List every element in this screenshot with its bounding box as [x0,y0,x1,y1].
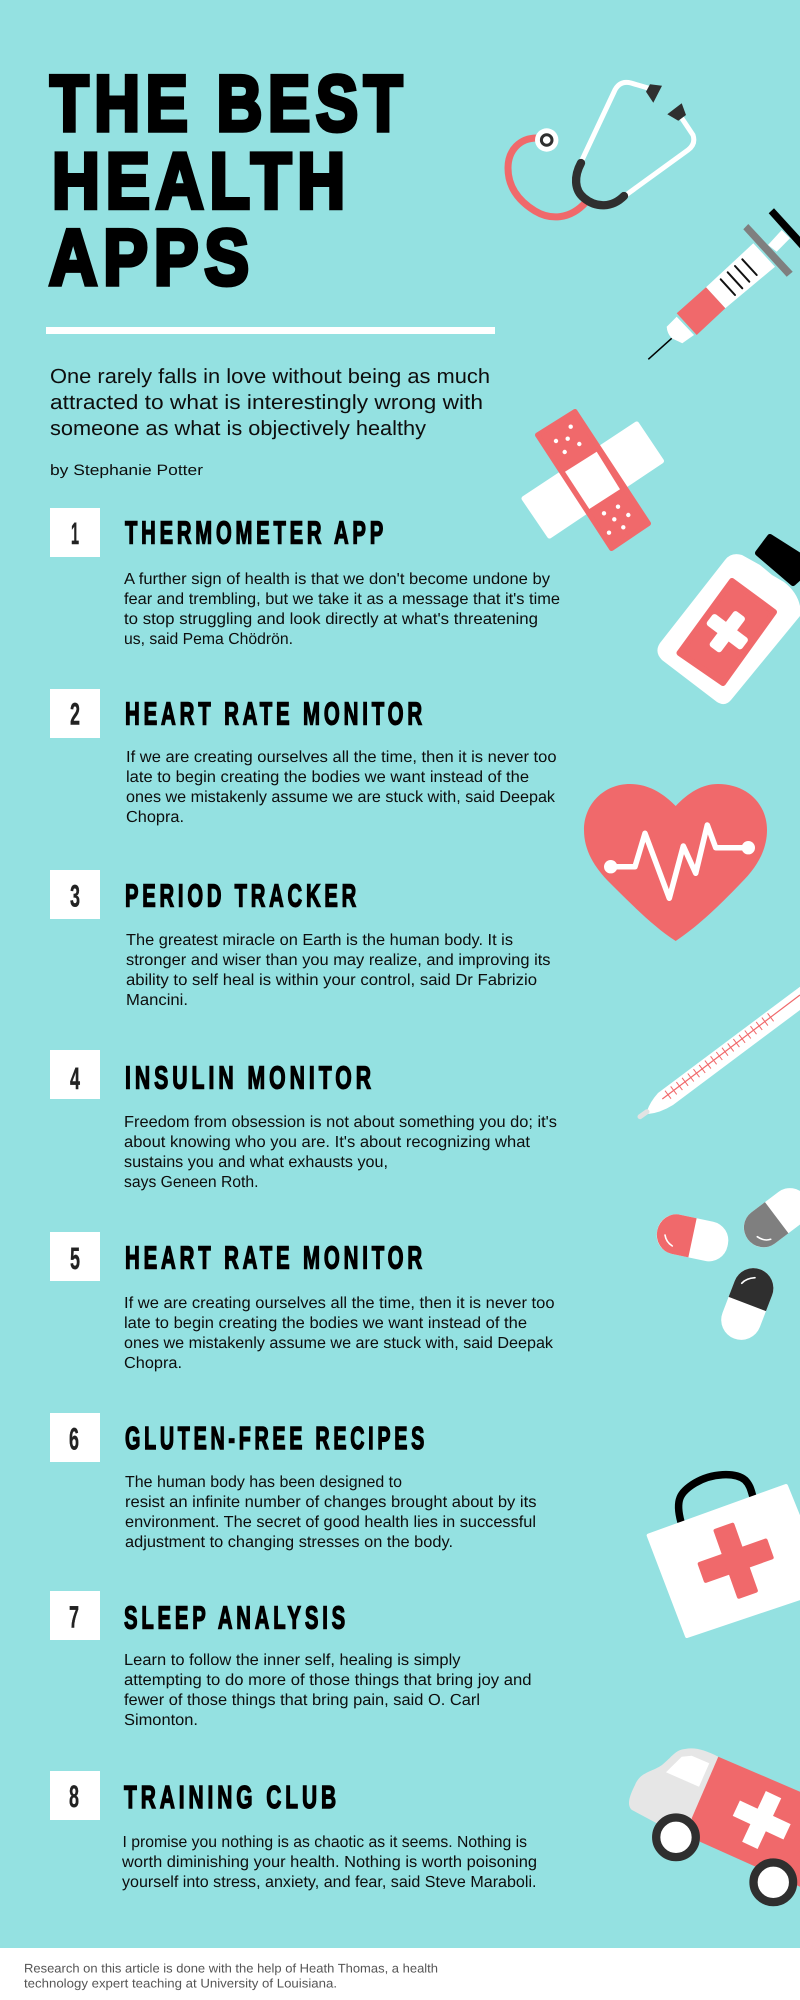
heading 4: INSULIN MONITOR [125,1060,375,1096]
icon: pills [653,1180,800,1346]
body 7: Simonton. [124,1712,198,1729]
number box 8 [50,1771,100,1820]
body 4: about knowing who you are. It's about recognizing what [124,1134,531,1151]
body 1: us, said Pema Chödrön. [124,631,293,648]
number box 2: 2 [70,696,80,732]
body 8 [121,1834,537,1891]
icon: syringe [648,208,800,359]
body 7: Learn to follow the inner self, healing is simply [124,1652,460,1669]
icon: ambulance [629,1748,800,1902]
body 4: says Geneen Roth. [124,1174,258,1191]
heading 8: TRAINING CLUB [124,1779,340,1815]
intro quote: One rarely falls in love without being as much [50,365,490,388]
body 2 [126,749,557,826]
body 3: The greatest miracle on Earth is the human body. It is [126,932,513,949]
icon: medicine bottle [657,537,800,704]
number box 5 [50,1232,100,1281]
body 7 [124,1652,532,1729]
body 3: stronger and wiser than you may realize, and improving its [126,952,550,969]
body 5: If we are creating ourselves all the time, then it is never too [124,1295,555,1312]
title: APPS [49,213,255,302]
item 8 [50,1771,537,1891]
body 2: ones we mistakenly assume we are stuck with, said Deepak [126,789,556,806]
number box 7: 7 [69,1600,79,1634]
intro quote: someone as what is objectively healthy [50,417,427,440]
body 3: Mancini. [126,992,188,1009]
number box 3 [50,870,100,919]
body 6: environment. The secret of good health lies in successful [125,1514,536,1531]
body 1: fear and trembling, but we take it as a message that it's time [124,591,560,608]
footer [0,1948,800,2000]
title [49,59,408,302]
body 3: ability to self heal is within your control, said Dr Fabrizio [126,972,537,989]
body 5: late to begin creating the bodies we want instead of the [124,1315,527,1332]
item 2 [50,689,557,826]
body 6: adjustment to changing stresses on the body. [125,1534,453,1551]
body 4: sustains you and what exhausts you, [124,1154,388,1171]
title: HEALTH [52,136,351,225]
footer: technology expert teaching at University of Louisiana. [24,1976,337,1990]
body 6 [125,1474,536,1551]
body 6: The human body has been designed to [125,1474,402,1491]
body 8: yourself into stress, anxiety, and fear, said Steve Maraboli. [122,1874,536,1891]
body 5 [124,1295,555,1372]
body 5: Chopra. [124,1355,182,1372]
item 6 [50,1413,536,1551]
heading 5: HEART RATE MONITOR [125,1239,426,1275]
body 2: If we are creating ourselves all the time, then it is never too [126,749,557,766]
number box 8: 8 [69,1779,79,1814]
number box 4: 4 [70,1061,80,1096]
number box 1 [50,508,100,557]
item 5 [50,1232,555,1372]
heading 7: SLEEP ANALYSIS [124,1600,349,1636]
body 1: to stop struggling and look directly at what's threatening [124,611,538,628]
body 5: ones we mistakenly assume we are stuck with, said Deepak [124,1335,554,1352]
number box 6: 6 [69,1422,79,1456]
number box 6 [50,1413,100,1462]
icon: stethoscope [508,82,694,217]
item 7 [50,1591,532,1729]
body 3 [126,932,550,1009]
intro quote: attracted to what is interestingly wrong with [50,391,483,414]
number box 2 [50,689,100,738]
byline: by Stephanie Potter [50,462,203,479]
body 1 [124,571,560,648]
body 2: late to begin creating the bodies we want instead of the [126,769,529,786]
number box 7 [50,1591,100,1640]
heading 1: THERMOMETER APP [125,514,387,550]
body 2: Chopra. [126,809,184,826]
icon: first aid kit [649,1475,800,1636]
body 7: fewer of those things that bring pain, said O. Carl [124,1692,480,1709]
icon: bandage [524,412,662,548]
number box 1: 1 [71,516,79,551]
icon: heart with pulse [584,784,767,941]
heading 6: GLUTEN-FREE RECIPES [125,1420,428,1456]
heading 3: PERIOD TRACKER [125,878,360,914]
body 4 [124,1114,557,1191]
item 4 [50,1050,557,1191]
icon: thermometer [640,987,800,1117]
number box 4 [50,1050,100,1099]
number box 3: 3 [70,878,80,914]
item 1 [50,508,560,648]
footer: Research on this article is done with the help of Heath Thomas, a health [24,1962,438,1976]
body 7: attempting to do more of those things that bring joy and [124,1672,532,1689]
number box 5: 5 [70,1241,80,1276]
body 8: I promise you nothing is as chaotic as it seems. Nothing is [122,1834,527,1851]
body 4: Freedom from obsession is not about something you do; it's [124,1114,557,1131]
body 8: worth diminishing your health. Nothing is worth poisoning [121,1854,537,1871]
body 1: A further sign of health is that we don't become undone by [124,571,550,588]
heading 2: HEART RATE MONITOR [125,696,426,732]
intro quote [50,365,490,440]
title: THE BEST [50,59,408,148]
body 6: resist an infinite number of changes brought about by its [125,1494,536,1511]
item 3 [50,870,550,1009]
